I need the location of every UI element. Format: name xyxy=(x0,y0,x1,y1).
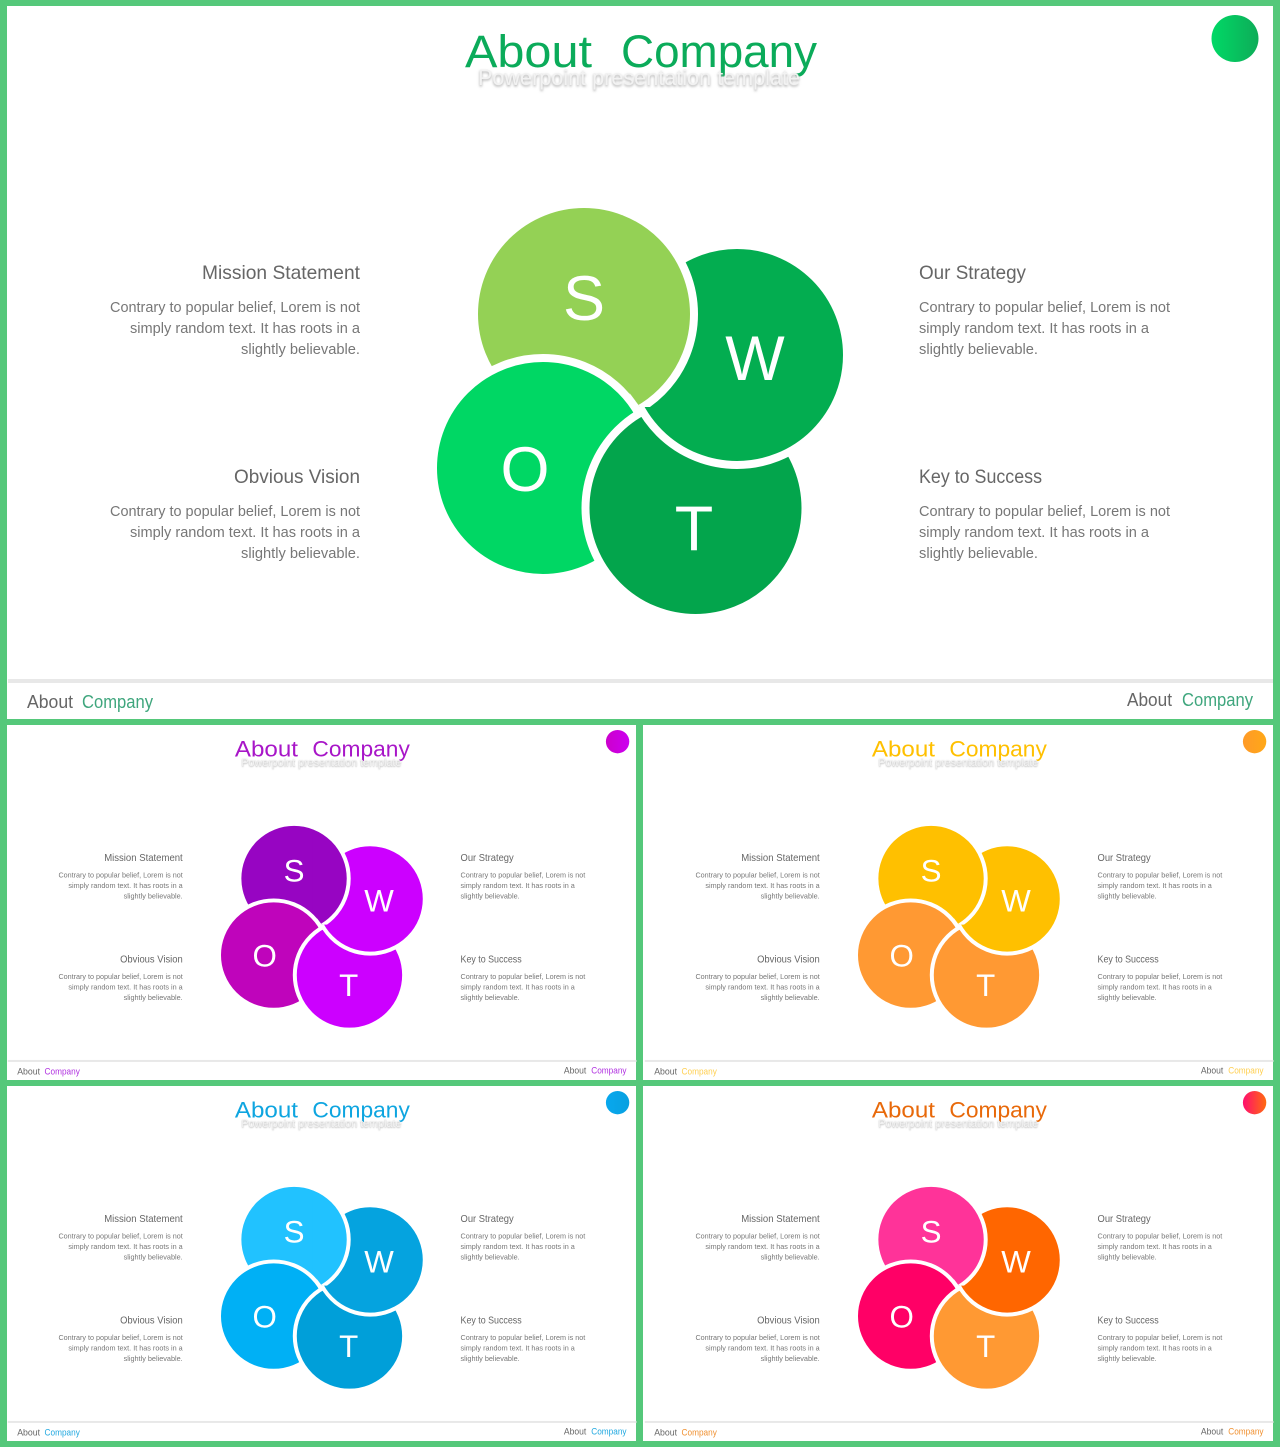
title: Company xyxy=(949,736,1048,761)
text block: obvious vision: Contrary to popular belief, Lorem is not xyxy=(58,1333,183,1342)
text block: key to success: Key to Success xyxy=(1098,1316,1159,1327)
footer: Company xyxy=(82,692,153,712)
text block: our strategy xyxy=(461,1214,585,1261)
text block: our strategy: Our Strategy xyxy=(919,262,1026,284)
text block: mission statement: simply random text. It has roots in a xyxy=(68,881,183,890)
text block: our strategy: slightly believable. xyxy=(1098,1252,1157,1261)
text block: mission statement: Mission Statement xyxy=(741,1214,820,1225)
text block: obvious vision xyxy=(695,955,820,1002)
swot pinwheel chart xyxy=(856,824,1062,1030)
text block: obvious vision xyxy=(695,1316,820,1363)
swot letters: S xyxy=(284,1215,304,1250)
text block: obvious vision xyxy=(58,1316,183,1363)
swot letters: S xyxy=(921,1215,941,1250)
text block: our strategy: Contrary to popular belief, Lorem is not xyxy=(1098,1232,1222,1241)
text block: key to success xyxy=(919,466,1170,562)
swot letters: O xyxy=(253,1300,277,1335)
swot letters xyxy=(890,854,1031,1003)
text block: obvious vision: slightly believable. xyxy=(241,546,360,562)
text block: key to success: slightly believable. xyxy=(461,993,520,1002)
title: Company xyxy=(621,26,818,77)
swot pinwheel chart xyxy=(433,204,847,618)
text block: key to success: Contrary to popular belief, Lorem is not xyxy=(461,1333,585,1342)
footer xyxy=(8,1060,636,1076)
swot letters: S xyxy=(921,854,941,889)
text block: obvious vision: simply random text. It has roots in a xyxy=(705,1343,820,1352)
text block: key to success xyxy=(1098,955,1222,1002)
swot letters: O xyxy=(890,939,914,974)
footer: Company xyxy=(1228,1426,1264,1436)
icon: corner dot xyxy=(1212,15,1258,62)
footer: Company xyxy=(682,1066,717,1076)
text block: mission statement: Contrary to popular belief, Lorem is not xyxy=(695,1232,820,1241)
text block: our strategy xyxy=(461,853,585,900)
text block: our strategy: simply random text. It has roots in a xyxy=(1098,881,1212,890)
swot letters xyxy=(253,854,394,1003)
swot pinwheel chart xyxy=(856,1185,1062,1391)
text block: key to success: Contrary to popular belief, Lorem is not xyxy=(461,972,585,981)
title xyxy=(235,1097,411,1122)
title: About xyxy=(235,736,299,761)
text block: our strategy: slightly believable. xyxy=(461,891,520,900)
swot letters: T xyxy=(675,494,713,564)
text block: mission statement: slightly believable. xyxy=(761,1252,820,1261)
title: About xyxy=(465,26,593,77)
text block: key to success: Contrary to popular belief, Lorem is not xyxy=(1098,972,1222,981)
swot letters: W xyxy=(364,883,394,918)
swot letters: O xyxy=(500,435,550,505)
text block: our strategy: Our Strategy xyxy=(461,853,514,864)
swot letters: W xyxy=(1001,883,1031,918)
text block: key to success xyxy=(1098,1316,1222,1363)
swot letters: O xyxy=(890,1300,914,1335)
text block: obvious vision: Contrary to popular belief, Lorem is not xyxy=(695,1333,820,1342)
text block: obvious vision: simply random text. It has roots in a xyxy=(68,982,183,991)
footer: Company xyxy=(1228,1065,1264,1075)
text block: key to success: slightly believable. xyxy=(1098,993,1157,1002)
text block: obvious vision: Contrary to popular belief, Lorem is not xyxy=(58,972,183,981)
text block: key to success: simply random text. It has roots in a xyxy=(461,1343,575,1352)
title: About xyxy=(235,1097,299,1122)
text block: our strategy: Contrary to popular belief, Lorem is not xyxy=(1098,871,1222,880)
footer: Company xyxy=(1182,690,1253,710)
text block: key to success: simply random text. It has roots in a xyxy=(461,982,575,991)
text block: obvious vision: simply random text. It has roots in a xyxy=(130,525,361,541)
text block: our strategy xyxy=(1098,853,1222,900)
text block: mission statement: slightly believable. xyxy=(124,1252,183,1261)
panel: purple slide xyxy=(7,725,636,1080)
title xyxy=(872,1097,1048,1122)
subtitle: Powerpoint presentation template xyxy=(478,65,800,90)
text block: key to success: simply random text. It has roots in a xyxy=(1098,1343,1212,1352)
text block: our strategy: simply random text. It has roots in a xyxy=(461,881,575,890)
text block: key to success xyxy=(461,955,585,1002)
text block: key to success: Key to Success xyxy=(461,1316,522,1327)
footer: Company xyxy=(591,1065,627,1075)
subtitle: Powerpoint presentation template xyxy=(878,757,1038,769)
text block: key to success: Key to Success xyxy=(1098,955,1159,966)
text block: our strategy: slightly believable. xyxy=(461,1252,520,1261)
footer: Company xyxy=(45,1427,80,1437)
footer: Company xyxy=(45,1066,80,1076)
title: Company xyxy=(312,1097,411,1122)
text block: our strategy: Our Strategy xyxy=(1098,1214,1151,1225)
text block: mission statement: Mission Statement xyxy=(202,262,361,284)
text block: key to success: simply random text. It has roots in a xyxy=(919,525,1150,541)
text block: our strategy xyxy=(919,262,1170,358)
text block: mission statement: Mission Statement xyxy=(741,853,820,864)
text block: obvious vision: Contrary to popular belief, Lorem is not xyxy=(110,504,360,520)
text block: mission statement xyxy=(58,853,183,900)
text block: our strategy: simply random text. It has roots in a xyxy=(919,321,1150,337)
footer xyxy=(8,1421,636,1437)
text block: key to success: slightly believable. xyxy=(919,546,1038,562)
swot letters xyxy=(253,1215,394,1364)
footer: About xyxy=(1127,690,1172,710)
text block: mission statement: Contrary to popular belief, Lorem is not xyxy=(695,871,820,880)
text block: our strategy: Contrary to popular belief, Lorem is not xyxy=(461,871,585,880)
subtitle: Powerpoint presentation template xyxy=(878,1118,1038,1130)
footer: About xyxy=(1201,1065,1224,1075)
swot letters: W xyxy=(725,324,785,394)
text block: obvious vision: slightly believable. xyxy=(124,993,183,1002)
text block: obvious vision: simply random text. It has roots in a xyxy=(705,982,820,991)
text block: obvious vision: Contrary to popular belief, Lorem is not xyxy=(695,972,820,981)
footer: About xyxy=(1201,1426,1224,1436)
text block: our strategy: simply random text. It has roots in a xyxy=(1098,1242,1212,1251)
panel: yellow slide xyxy=(643,725,1273,1080)
swot letters xyxy=(500,264,785,564)
text block: mission statement: slightly believable. xyxy=(241,342,360,358)
text block: mission statement: simply random text. It has roots in a xyxy=(705,881,820,890)
icon: corner dot xyxy=(606,1091,629,1114)
text block: our strategy: Our Strategy xyxy=(461,1214,514,1225)
text block: mission statement: slightly believable. xyxy=(124,891,183,900)
swot letters: W xyxy=(1001,1244,1031,1279)
panel: pink orange slide xyxy=(643,1086,1273,1441)
title xyxy=(465,26,818,77)
text block: mission statement: simply random text. It has roots in a xyxy=(68,1242,183,1251)
swot letters: T xyxy=(976,1329,995,1364)
swot letters: T xyxy=(339,968,358,1003)
footer: About xyxy=(27,692,73,712)
text block: mission statement: Contrary to popular belief, Lorem is not xyxy=(58,1232,183,1241)
text block: mission statement: Contrary to popular belief, Lorem is not xyxy=(58,871,183,880)
text block: key to success: Contrary to popular belief, Lorem is not xyxy=(1098,1333,1222,1342)
text block: obvious vision: slightly believable. xyxy=(761,1354,820,1363)
text block: key to success xyxy=(461,1316,585,1363)
text block: our strategy xyxy=(1098,1214,1222,1261)
swot pinwheel chart xyxy=(219,1185,425,1391)
title: Company xyxy=(312,736,411,761)
swot letters: W xyxy=(364,1244,394,1279)
footer: Company xyxy=(682,1427,717,1437)
text block: mission statement xyxy=(110,262,361,358)
text block: our strategy: Contrary to popular belief, Lorem is not xyxy=(919,300,1170,316)
text block: mission statement: Mission Statement xyxy=(104,1214,183,1225)
text block: obvious vision xyxy=(58,955,183,1002)
text block: mission statement: simply random text. It has roots in a xyxy=(705,1242,820,1251)
text block: obvious vision: slightly believable. xyxy=(761,993,820,1002)
title: About xyxy=(872,1097,936,1122)
title xyxy=(235,736,411,761)
title: Company xyxy=(949,1097,1048,1122)
text block: key to success: simply random text. It has roots in a xyxy=(1098,982,1212,991)
footer: About xyxy=(564,1065,587,1075)
swot letters: S xyxy=(284,854,304,889)
text block: obvious vision: slightly believable. xyxy=(124,1354,183,1363)
swot pinwheel chart xyxy=(219,824,425,1030)
footer: Company xyxy=(591,1426,627,1436)
text block: key to success: slightly believable. xyxy=(461,1354,520,1363)
subtitle: Powerpoint presentation template xyxy=(241,1118,401,1130)
footer: About xyxy=(654,1066,678,1076)
swot letters: S xyxy=(563,264,605,334)
icon: corner dot xyxy=(606,730,629,753)
text block: our strategy: simply random text. It has roots in a xyxy=(461,1242,575,1251)
icon: corner dot xyxy=(1243,730,1266,753)
text block: obvious vision: Obvious Vision xyxy=(234,466,360,488)
footer: About xyxy=(17,1066,41,1076)
text block: our strategy: Our Strategy xyxy=(1098,853,1151,864)
text block: mission statement xyxy=(58,1214,183,1261)
text block: mission statement xyxy=(695,853,820,900)
subtitle: Powerpoint presentation template xyxy=(241,757,401,769)
text block: our strategy: Contrary to popular belief, Lorem is not xyxy=(461,1232,585,1241)
text block: mission statement: simply random text. It has roots in a xyxy=(130,321,361,337)
text block: obvious vision xyxy=(110,466,361,562)
swot letters: T xyxy=(976,968,995,1003)
text block: obvious vision: simply random text. It has roots in a xyxy=(68,1343,183,1352)
footer: About xyxy=(564,1426,587,1436)
panel: green main slide xyxy=(7,6,1273,719)
text block: mission statement: Contrary to popular belief, Lorem is not xyxy=(110,300,360,316)
text block: mission statement: Mission Statement xyxy=(104,853,183,864)
icon: corner dot xyxy=(1243,1091,1266,1114)
title: About xyxy=(872,736,936,761)
footer: About xyxy=(17,1427,41,1437)
text block: key to success: Key to Success xyxy=(919,466,1042,488)
text block: obvious vision: Obvious Vision xyxy=(120,1316,183,1327)
text block: key to success: Key to Success xyxy=(461,955,522,966)
text block: key to success: Contrary to popular belief, Lorem is not xyxy=(919,504,1170,520)
text block: our strategy: slightly believable. xyxy=(1098,891,1157,900)
text block: mission statement: slightly believable. xyxy=(761,891,820,900)
swot letters xyxy=(890,1215,1031,1364)
swot letters: T xyxy=(339,1329,358,1364)
text block: obvious vision: Obvious Vision xyxy=(120,955,183,966)
text block: our strategy: slightly believable. xyxy=(919,342,1038,358)
text block: obvious vision: Obvious Vision xyxy=(757,955,820,966)
text block: mission statement xyxy=(695,1214,820,1261)
panel: blue slide xyxy=(7,1086,636,1441)
footer xyxy=(8,679,1273,712)
text block: key to success: slightly believable. xyxy=(1098,1354,1157,1363)
footer xyxy=(645,1060,1273,1076)
text block: obvious vision: Obvious Vision xyxy=(757,1316,820,1327)
footer: About xyxy=(654,1427,678,1437)
title xyxy=(872,736,1048,761)
footer xyxy=(645,1421,1273,1437)
swot letters: O xyxy=(253,939,277,974)
